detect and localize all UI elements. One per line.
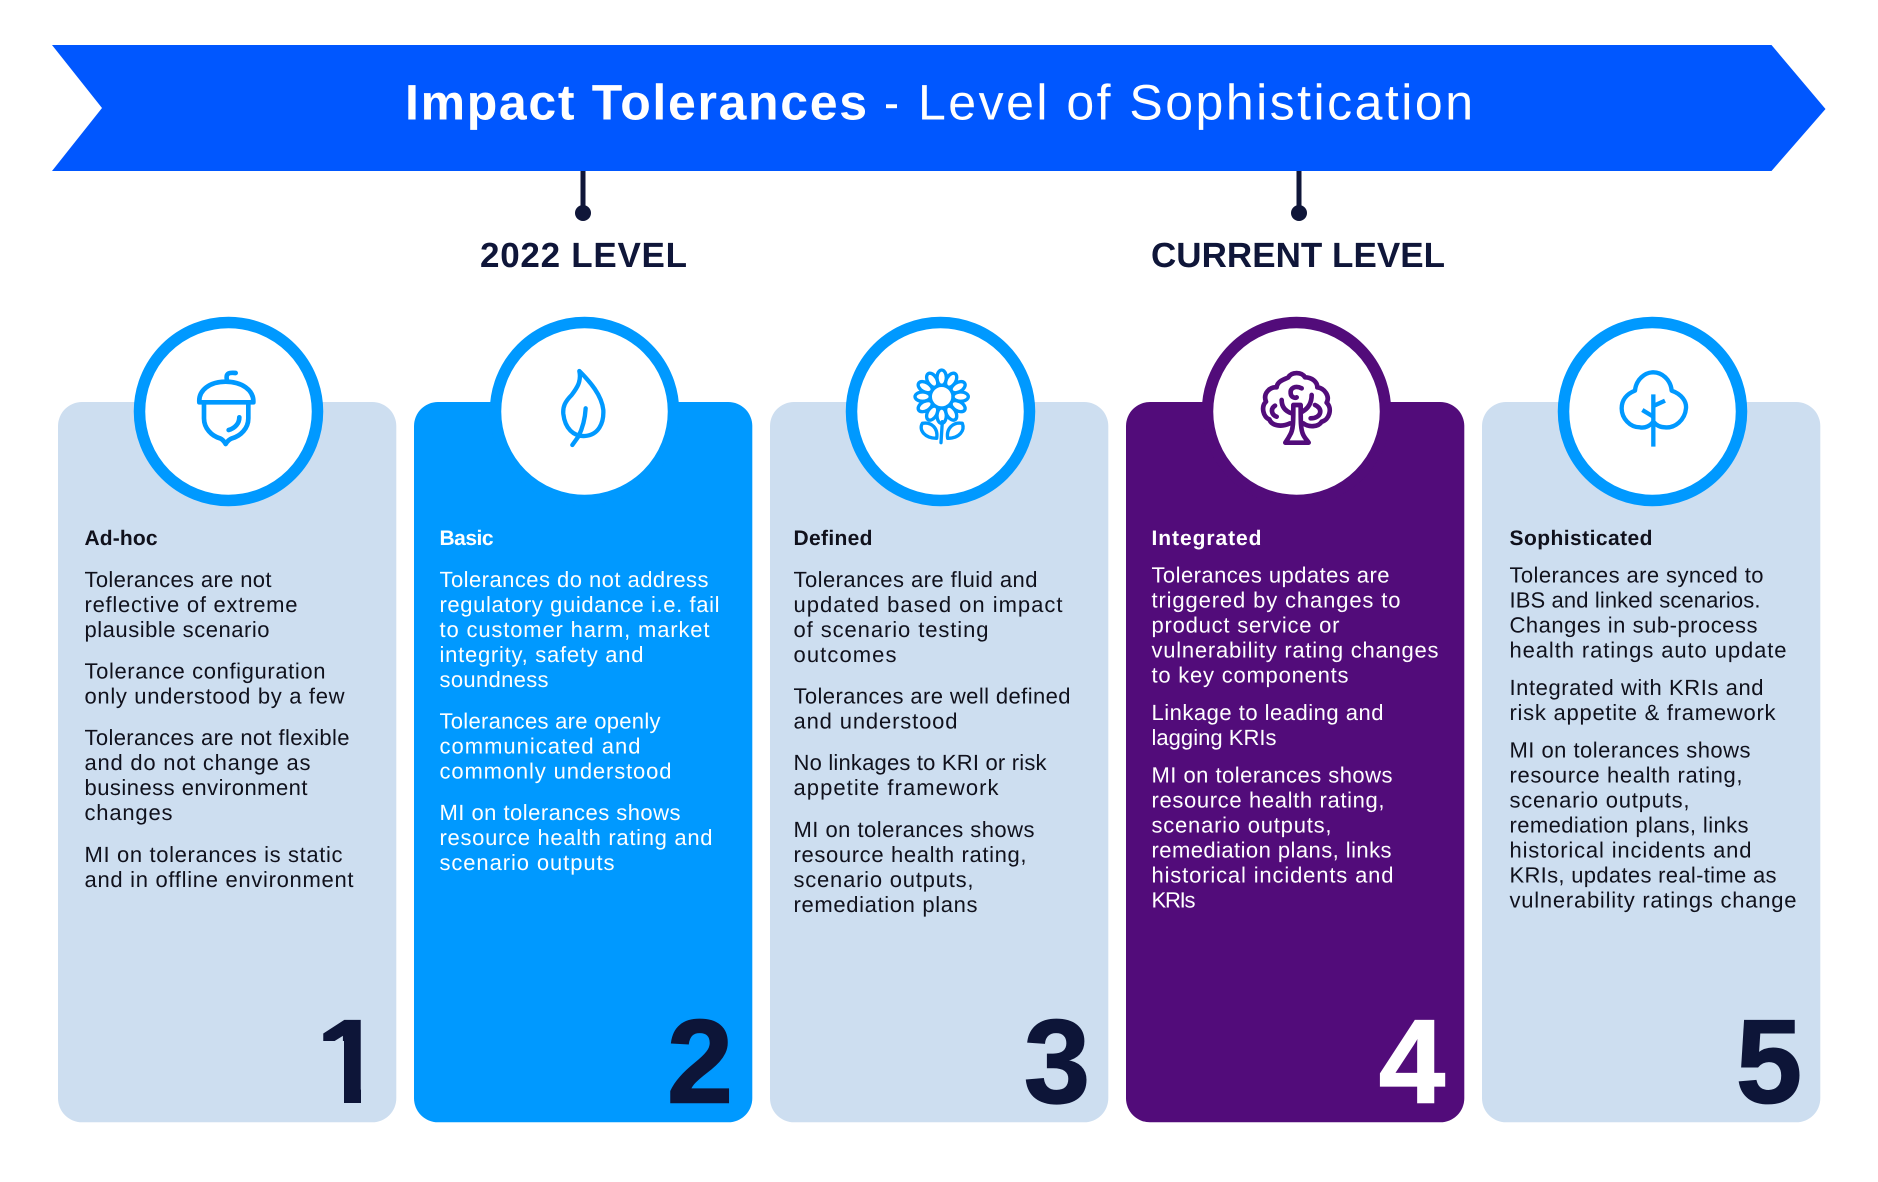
text block: basic description: scenario outputs — [440, 850, 614, 875]
text block: sophisticated description: Changes in sub-process — [1510, 612, 1758, 638]
text block: sophisticated description — [1510, 562, 1796, 912]
icon ring: tree — [1564, 322, 1742, 500]
panel: level 3 defined — [770, 322, 1108, 1129]
text block: sophisticated description: risk appetite & framework — [1510, 700, 1776, 725]
text block: defined description — [794, 567, 1070, 917]
text block: ad-hoc description: MI on tolerances is static — [84, 842, 342, 867]
text block: ad-hoc description: changes — [84, 800, 172, 825]
text block: defined description: scenario outputs, — [794, 867, 974, 892]
text block: ad-hoc description: plausible scenario — [84, 617, 270, 642]
heading: defined: Defined — [794, 527, 872, 550]
text block: integrated description: resource health rating, — [1152, 788, 1384, 812]
text block: basic description: Tolerances are openly — [440, 708, 660, 734]
text block: defined description: outcomes — [794, 642, 896, 667]
text block: defined description: No linkages to KRI or risk — [794, 750, 1048, 775]
text block: sophisticated description: scenario outputs, — [1510, 788, 1690, 812]
text block: basic description: to customer harm, market — [440, 617, 710, 642]
panel: level 1 ad-hoc — [58, 322, 396, 1129]
text block: basic description: communicated and — [440, 734, 640, 758]
number 1: 1 — [316, 996, 382, 1129]
text block: basic description: regulatory guidance i.e. fail — [440, 592, 720, 617]
text block: sophisticated description: health ratings auto update — [1510, 638, 1786, 662]
icon: flower — [915, 370, 968, 443]
text block: integrated description: remediation plans, links — [1152, 838, 1392, 862]
number 4: 4 — [1379, 996, 1445, 1129]
icon ring: oak tree — [1208, 322, 1386, 500]
banner — [52, 45, 1826, 171]
number 3: 3 — [1024, 996, 1090, 1129]
text block: basic description: soundness — [440, 667, 548, 692]
text block: sophisticated description: KRIs, updates real-time as — [1510, 862, 1776, 888]
text block: sophisticated description: IBS and linked scenarios. — [1510, 588, 1760, 612]
number 2: 2 — [667, 996, 733, 1129]
heading: ad-hoc: Ad-hoc — [84, 527, 158, 550]
text block: defined description: Tolerances are well defined — [794, 684, 1070, 708]
heading: sophisticated: Sophisticated — [1510, 527, 1652, 550]
icon ring: leaf — [496, 322, 674, 500]
marker: current level — [1151, 171, 1445, 275]
text block: ad-hoc description: Tolerance configuration — [84, 658, 326, 684]
text block: integrated description: product service or — [1152, 612, 1340, 638]
text block: defined description: updated based on impact — [794, 592, 1062, 617]
text block: ad-hoc description: business environment — [84, 775, 308, 800]
text block: integrated description: lagging KRIs — [1152, 725, 1276, 750]
text block: sophisticated description: vulnerability ratings change — [1510, 888, 1796, 912]
text block: sophisticated description: MI on tolerances shows — [1510, 738, 1750, 762]
text block: sophisticated description: historical incidents and — [1510, 838, 1752, 862]
text block: basic description: integrity, safety and — [440, 642, 644, 667]
title: Impact Tolerances — [405, 74, 867, 130]
text block: sophisticated description: Tolerances are synced to — [1510, 562, 1764, 588]
text block: ad-hoc description: and do not change as — [84, 750, 310, 775]
text block: defined description: and understood — [794, 708, 958, 734]
title: - — [884, 74, 899, 130]
marker: current level: CURRENT LEVEL — [1151, 236, 1445, 275]
text block: ad-hoc description: reflective of extreme — [84, 592, 298, 617]
icon: acorn — [199, 373, 253, 444]
text block: integrated description: triggered by changes to — [1152, 588, 1400, 612]
marker: 2022 level: 2022 LEVEL — [480, 236, 687, 275]
text block: integrated description: Tolerances updates are — [1152, 562, 1390, 588]
text block: ad-hoc description: only understood by a few — [84, 684, 345, 708]
icon: leaf — [563, 371, 603, 445]
icon: oak tree — [1263, 373, 1330, 443]
title — [405, 74, 1473, 130]
text block: defined description: appetite framework — [794, 775, 1000, 800]
text block: basic description — [440, 567, 720, 875]
text block: basic description: MI on tolerances shows — [440, 800, 680, 825]
text block: integrated description: KRIs — [1152, 888, 1196, 912]
text block: defined description: of scenario testing — [794, 617, 988, 642]
text block: sophisticated description: Integrated with KRIs and — [1510, 675, 1764, 700]
text block: integrated description: MI on tolerances shows — [1152, 762, 1392, 788]
text block: ad-hoc description: Tolerances are not flexible — [84, 725, 350, 750]
text block: defined description: MI on tolerances shows — [794, 817, 1034, 842]
text block: defined description: Tolerances are fluid and — [794, 567, 1038, 592]
text block: sophisticated description: remediation plans, links — [1510, 812, 1748, 838]
panel: level 2 basic — [414, 322, 752, 1129]
text block: ad-hoc description: and in offline environment — [84, 867, 354, 892]
panel: level 4 integrated — [1126, 322, 1464, 1129]
icon ring: acorn — [140, 322, 318, 500]
text block: basic description: Tolerances do not address — [440, 567, 708, 592]
text block: defined description: resource health rating, — [794, 842, 1026, 867]
text block: integrated description: scenario outputs, — [1152, 812, 1332, 838]
text block: integrated description: to key components — [1152, 662, 1348, 688]
text block: integrated description: vulnerability rating changes — [1152, 638, 1438, 662]
text block: sophisticated description: resource health rating, — [1510, 762, 1742, 788]
text block: basic description: resource health rating and — [440, 825, 712, 850]
text block: integrated description: historical incidents and — [1152, 862, 1394, 888]
icon ring: flower — [852, 322, 1030, 500]
text block: integrated description: Linkage to leading and — [1152, 700, 1384, 725]
panel: level 5 sophisticated — [1482, 322, 1820, 1129]
heading: basic: Basic — [440, 527, 494, 550]
icon: tree — [1622, 372, 1686, 447]
number 5: 5 — [1736, 996, 1802, 1129]
text block: integrated description — [1152, 562, 1438, 912]
text block: defined description: remediation plans — [794, 892, 978, 917]
text block: ad-hoc description — [84, 567, 354, 892]
text block: ad-hoc description: Tolerances are not — [84, 567, 272, 592]
title: Level of Sophistication — [918, 74, 1473, 130]
marker: 2022 level — [480, 171, 687, 275]
heading: integrated: Integrated — [1152, 527, 1262, 550]
text block: basic description: commonly understood — [440, 758, 672, 784]
